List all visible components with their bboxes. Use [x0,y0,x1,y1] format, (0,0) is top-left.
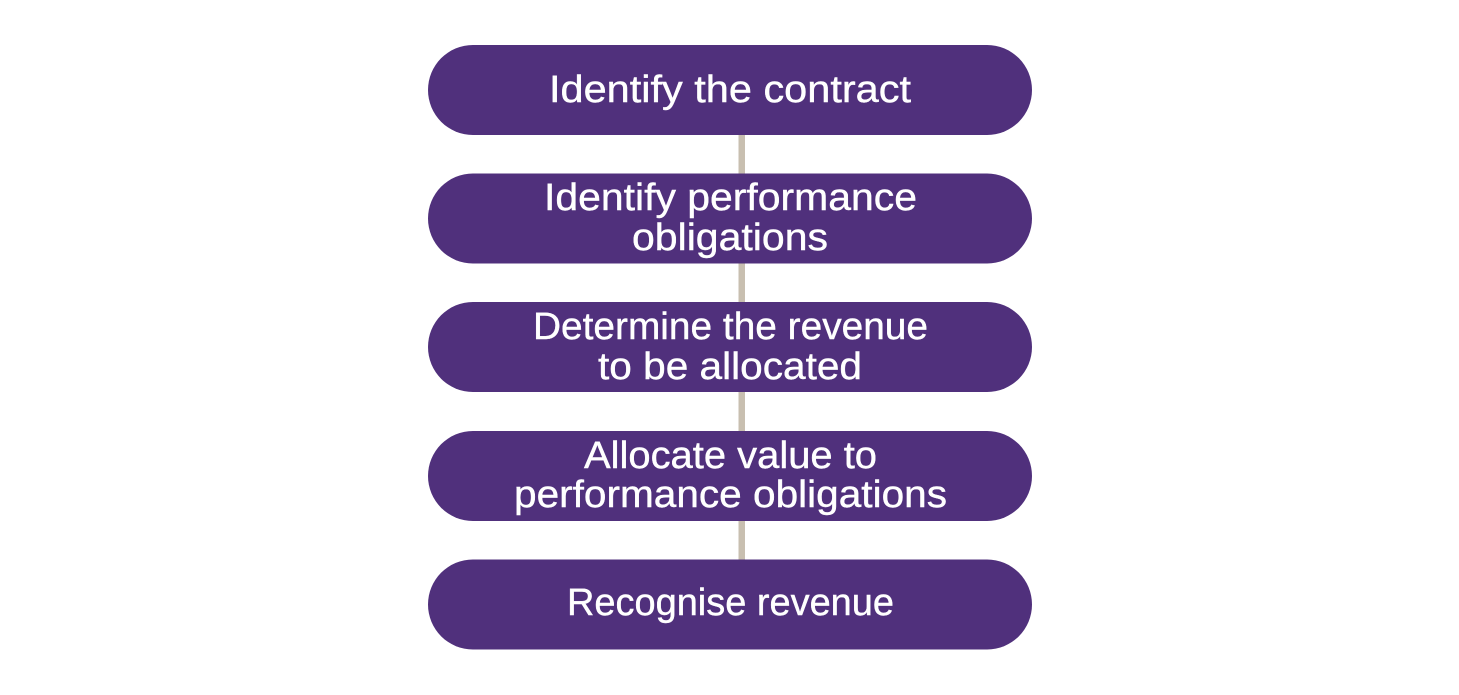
step 5: Recognise revenue [428,560,1032,650]
step 2: Identify performance obligations: obligations [632,217,828,259]
step 5: Recognise revenue: Recognise revenue [567,582,894,624]
step 1: Identify the contract [428,45,1032,135]
step 3: Determine the revenue to be allocated [428,302,1032,392]
step 1: Identify the contract: Identify the contract [549,69,911,111]
step 2: Identify performance obligations: Identify performance [544,177,917,219]
step 3: Determine the revenue to be allocated: Determine the revenue [533,306,928,348]
connector line between steps [738,130,745,565]
step 4: Allocate value to performance obligations: performance obligations [514,474,947,516]
step 2: Identify performance obligations [428,174,1032,264]
step 4: Allocate value to performance obligations [428,431,1032,521]
step 3: Determine the revenue to be allocated: to be allocated [598,346,862,388]
step 4: Allocate value to performance obligations: Allocate value to [584,435,877,477]
